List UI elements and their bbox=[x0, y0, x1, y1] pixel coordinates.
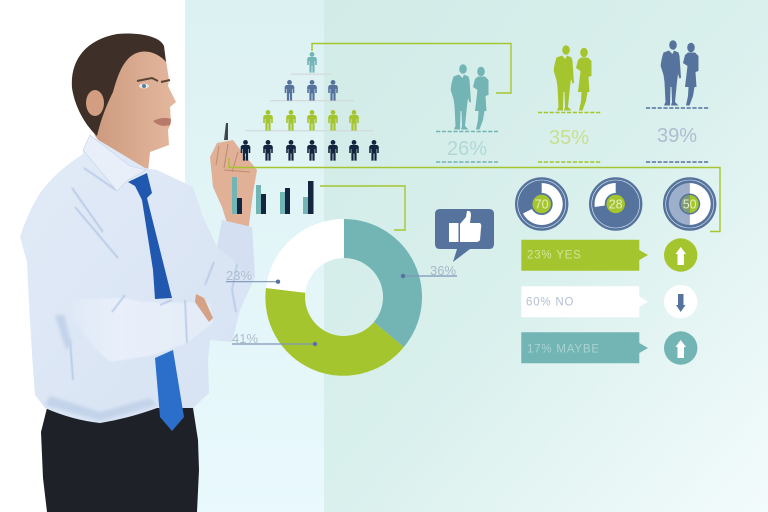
finger lines bbox=[216, 144, 250, 172]
shirt folds bbox=[60, 168, 240, 380]
label: 23%: 23% bbox=[226, 268, 252, 283]
icon: thumbs up bubble bbox=[435, 209, 494, 262]
businessman figure bbox=[20, 34, 257, 512]
legend row: 23% yes: 23% YES bbox=[527, 250, 582, 262]
progress dial: 28 bbox=[590, 178, 641, 230]
necktie lower bbox=[155, 350, 184, 431]
icon: up arrow maybe bbox=[664, 331, 697, 365]
top row bbox=[307, 52, 317, 73]
donut chart bbox=[226, 219, 457, 376]
second row bbox=[285, 80, 338, 101]
silhouette group: 26%: 26% bbox=[447, 138, 487, 160]
left hand under sleeve bbox=[195, 294, 213, 322]
segment: 36% bbox=[344, 219, 422, 347]
hair bbox=[72, 34, 166, 136]
bottom row bbox=[241, 140, 379, 161]
label: 41%: 41% bbox=[232, 331, 258, 346]
bar chart bbox=[232, 177, 314, 214]
progress dial: 70: 70 bbox=[535, 198, 549, 212]
label: 41% bbox=[232, 331, 317, 346]
silhouette group: 39% bbox=[646, 40, 709, 162]
progress dial: 70 bbox=[516, 178, 567, 230]
icon: up arrow yes bbox=[664, 238, 697, 272]
legend row: 60% no: 60% NO bbox=[526, 296, 574, 308]
legend row: 60% no bbox=[521, 285, 697, 318]
pyramid dividers bbox=[245, 74, 374, 131]
pyramid of people bbox=[241, 52, 379, 161]
cuff bbox=[217, 220, 255, 277]
silhouette group: 39%: 39% bbox=[657, 125, 697, 147]
icon: down arrow no bbox=[664, 285, 697, 318]
neck and face bbox=[82, 48, 176, 172]
silhouette group: 35% bbox=[538, 45, 601, 162]
shirt bbox=[20, 135, 255, 423]
connector lines bbox=[229, 44, 720, 232]
progress dial: 50 bbox=[664, 178, 715, 230]
third row bbox=[263, 110, 359, 131]
silhouette group: 26% bbox=[436, 64, 498, 162]
trousers bbox=[41, 405, 199, 512]
label: 23% bbox=[226, 268, 280, 284]
segment: 23% bbox=[266, 219, 344, 293]
ear bbox=[86, 90, 104, 116]
silhouette group: 35%: 35% bbox=[549, 127, 589, 149]
collar bbox=[83, 135, 146, 191]
raised hand bbox=[210, 140, 257, 233]
pen bbox=[224, 123, 228, 140]
legend row: 17% maybe bbox=[521, 331, 697, 365]
label: 36%: 36% bbox=[430, 263, 456, 278]
necktie bbox=[128, 173, 172, 299]
label: 36% bbox=[401, 263, 457, 278]
legend row: 17% maybe: 17% MAYBE bbox=[527, 344, 600, 356]
folded arm bbox=[60, 298, 213, 362]
facial features bbox=[137, 78, 171, 126]
legend row: 23% yes bbox=[521, 238, 697, 272]
progress dial: 50: 50 bbox=[683, 198, 697, 212]
progress dial: 28: 28 bbox=[609, 198, 623, 212]
segment: 41% bbox=[265, 288, 404, 376]
shirt shadows bbox=[45, 315, 157, 421]
